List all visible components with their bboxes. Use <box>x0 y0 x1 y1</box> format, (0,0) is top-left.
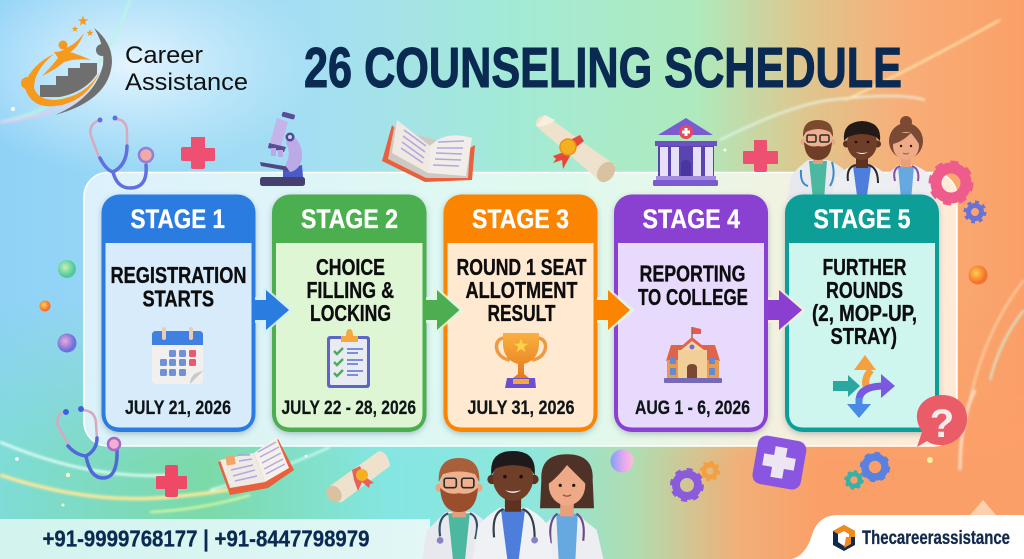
doctor: woman <box>532 454 605 559</box>
doctor: man with glasses <box>787 120 852 200</box>
stage 3 card <box>444 194 598 432</box>
icon: trophy <box>496 333 546 388</box>
icon: brand hexagon <box>833 525 855 551</box>
icon: diploma scroll top <box>536 115 619 186</box>
icon: purple plus tile <box>751 434 808 491</box>
stage 4 name: REPORTING <box>640 260 746 286</box>
stage 2 name: CHOICE <box>316 254 385 280</box>
stage 2 date: JULY 22 - 28, 2026 <box>282 397 416 419</box>
stage 1 label: STAGE 1 <box>130 204 225 234</box>
stage 2 name <box>306 254 394 326</box>
stage 1 date: JULY 21, 2026 <box>125 397 231 419</box>
icon: diploma scroll bottom <box>323 451 390 505</box>
stage 5 label: STAGE 5 <box>814 204 910 234</box>
arrow: stage 3 to 4 <box>597 285 635 335</box>
logo wordmark: Assistance <box>125 69 248 96</box>
doctor: man with beard <box>421 458 500 559</box>
stage 5 name: STRAY) <box>830 323 897 349</box>
stage 3 name <box>456 254 586 326</box>
icon: pink gear <box>931 163 971 203</box>
stage 2 name: LOCKING <box>310 300 391 326</box>
logo wordmark: Career <box>125 42 203 69</box>
phone numbers: +91-9999768177 | +91-8447798979 <box>42 526 370 552</box>
decorative balls <box>40 260 988 472</box>
icon: college building <box>664 327 722 383</box>
stage 2 card <box>272 194 426 432</box>
stage 4 name <box>638 260 748 310</box>
stage 1 name <box>110 262 246 312</box>
icon: red cross top left <box>181 137 215 169</box>
stage 1 card <box>102 194 256 432</box>
icon: red cross bottom left <box>156 465 187 497</box>
arrow: stage 4 to 5 <box>768 285 806 335</box>
arrow: stage 2 to 3 <box>426 285 464 335</box>
icon: stethoscope bottom <box>57 406 120 478</box>
stage 3 name: ROUND 1 SEAT <box>456 254 586 280</box>
doctor: man center <box>472 451 554 559</box>
stage 1 name: STARTS <box>142 286 214 312</box>
white panel <box>84 172 957 446</box>
stage 4 label: STAGE 4 <box>642 204 740 234</box>
stage 3 name: RESULT <box>488 300 556 326</box>
stage 5 name: FURTHER <box>822 254 907 280</box>
logo: Career Assistance <box>21 16 248 115</box>
icon: microscope <box>260 112 305 186</box>
icon: red cross top right <box>743 140 778 172</box>
stage 5 name: ROUNDS <box>826 277 903 303</box>
icon: question bubble: ? <box>930 402 954 446</box>
doctors top group <box>787 116 937 203</box>
stage 2 label: STAGE 2 <box>301 204 398 234</box>
stage 4 name: TO COLLEGE <box>638 284 748 310</box>
stage 4 date: AUG 1 - 6, 2026 <box>635 397 750 419</box>
icon: open book bottom <box>218 437 294 495</box>
icon: branching arrows <box>833 355 895 418</box>
logo wordmark <box>125 42 248 96</box>
logo emblem <box>21 16 112 115</box>
stage 5 name <box>812 254 917 349</box>
icon: museum building <box>653 118 718 186</box>
stage 3 name: ALLOTMENT <box>466 277 578 303</box>
icon: blue and teal gears <box>846 454 888 488</box>
stage 1 name: REGISTRATION <box>110 262 246 288</box>
stage 4 card <box>614 194 768 432</box>
stage 5 card <box>785 194 939 432</box>
icon: clipboard checklist <box>327 329 370 388</box>
stage 5 name: (2, MOP-UP, <box>812 300 917 326</box>
arrow: stage 1 to 2 <box>255 285 293 335</box>
doctor: man with curly hair <box>830 121 892 203</box>
stage 2 name: FILLING & <box>306 277 394 303</box>
icon: blue gear small <box>965 202 985 222</box>
contact bar <box>0 519 430 559</box>
brand tab <box>792 500 1024 559</box>
icon: stethoscope top <box>90 116 153 188</box>
icon: calendar <box>152 327 203 384</box>
doctor: woman with bun <box>876 116 937 200</box>
icon: open book top <box>382 120 475 182</box>
stage 3 date: JULY 31, 2026 <box>468 397 575 419</box>
doctors bottom group <box>421 451 605 559</box>
icon: purple gear with orange gear <box>672 462 719 500</box>
icon: question bubble <box>917 395 967 447</box>
stage 3 label: STAGE 3 <box>472 204 569 234</box>
